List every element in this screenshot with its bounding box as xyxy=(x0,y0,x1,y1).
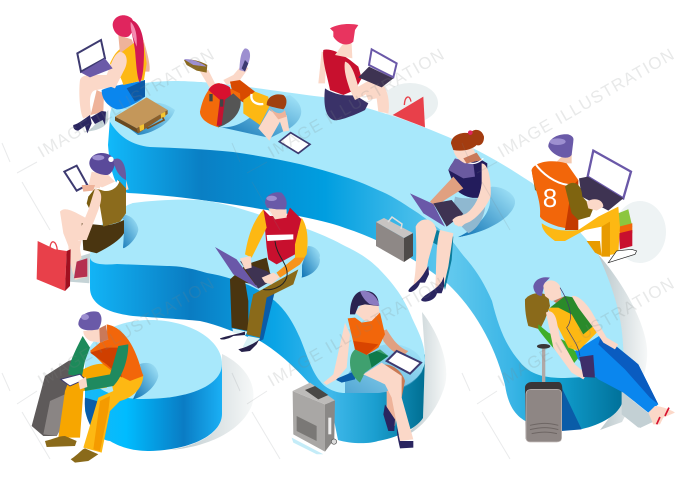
watermarks: IMAGE ILLUSTRATION xyxy=(494,45,677,161)
dot top surface xyxy=(85,320,222,399)
laptop xyxy=(215,247,277,289)
middle arc top surface xyxy=(90,200,425,393)
icon: brown briefcase xyxy=(115,97,168,133)
backpack xyxy=(200,83,241,127)
person: man with orange number 8 jersey xyxy=(532,134,637,263)
laptop xyxy=(410,193,463,227)
tablet xyxy=(387,351,421,374)
jersey number: 8 xyxy=(543,183,557,213)
watermarks: IMAGE ILLUSTRATION xyxy=(34,274,217,390)
icon: metal briefcase xyxy=(376,217,413,262)
laptop xyxy=(77,40,113,77)
watermarks: IMAGE ILLUSTRATION xyxy=(494,274,677,390)
person: woman with tablet and red bag xyxy=(37,153,138,291)
big arc top surface xyxy=(110,81,623,378)
person: woman with laptop top left xyxy=(73,15,150,133)
person: lying reader with backpack xyxy=(184,48,310,153)
phone xyxy=(61,374,85,386)
middle arc side xyxy=(90,203,425,443)
laptop xyxy=(579,151,631,211)
tablet xyxy=(279,133,310,153)
person: woman in red with laptop xyxy=(318,24,425,127)
person: woman with tablet on middle arc xyxy=(323,291,421,448)
person: woman with ponytail and laptop xyxy=(408,130,515,302)
person: man on dot with phone xyxy=(32,311,158,463)
icon: rolling suitcase xyxy=(525,344,562,442)
icon: gray rolling suitcase xyxy=(292,383,337,454)
background shadows xyxy=(170,83,666,450)
tablet xyxy=(64,166,87,191)
laptop xyxy=(358,49,397,87)
person: reclining woman with suitcase xyxy=(525,277,675,442)
watermarks: IMAGE ILLUSTRATION xyxy=(34,45,217,161)
icon: red shopping bag xyxy=(393,97,425,127)
icon: small backpack xyxy=(618,209,632,249)
person: man in red vest with laptop xyxy=(215,192,320,352)
phone xyxy=(579,355,595,378)
dot side xyxy=(85,364,222,451)
watermarks: IMAGE ILLUSTRATION xyxy=(264,274,447,390)
dimples on seats xyxy=(118,95,515,399)
icon: dark duffel bag xyxy=(32,358,85,436)
icon: red shopping bag xyxy=(37,241,71,291)
watermarks: IMAGE ILLUSTRATION xyxy=(264,45,447,161)
big arc side xyxy=(108,82,623,429)
